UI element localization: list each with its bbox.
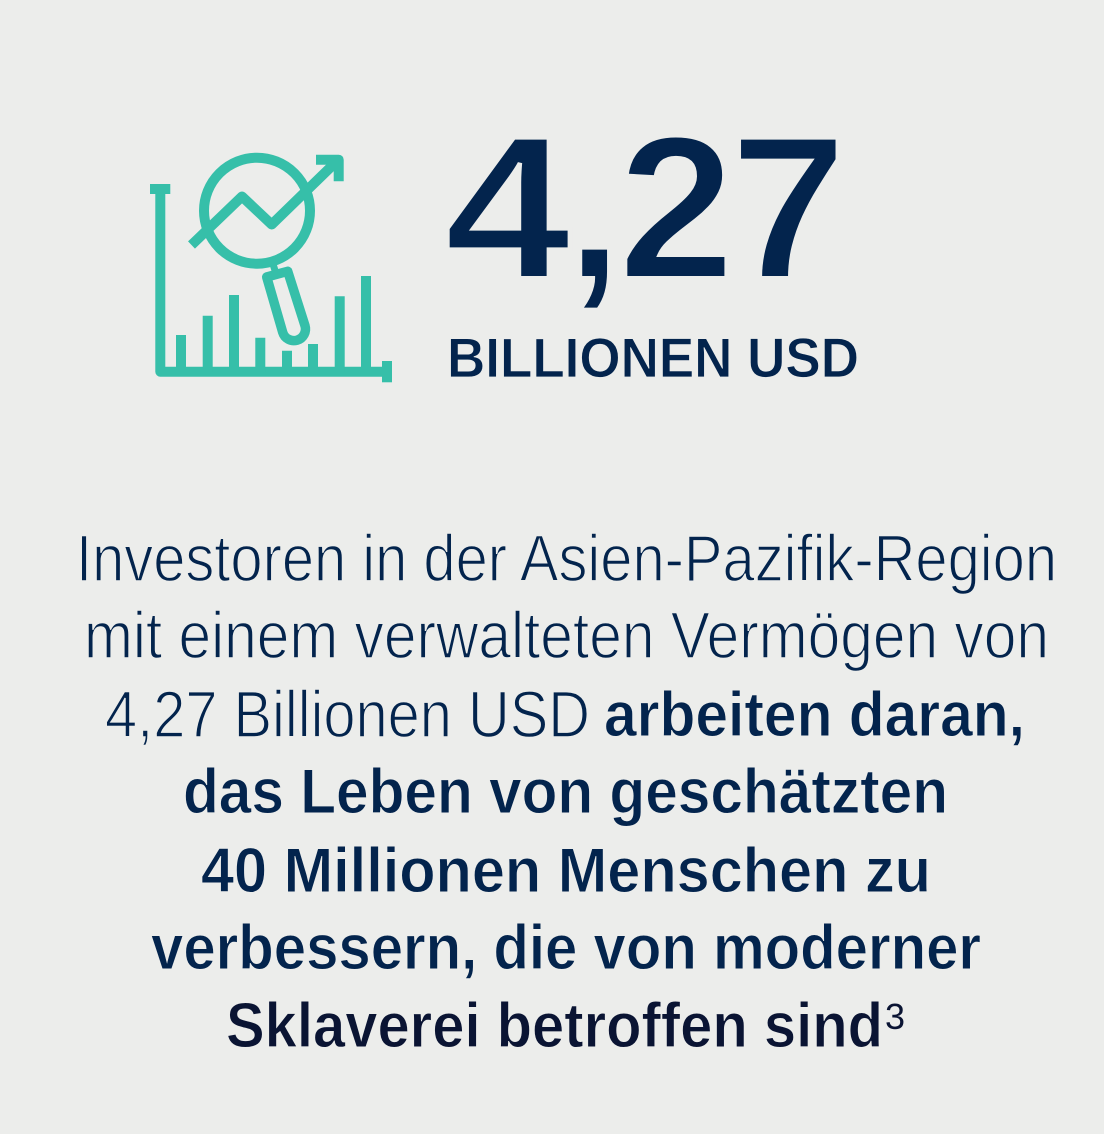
body text: arbeiten daran, xyxy=(604,680,1025,750)
big number: 4 xyxy=(444,93,571,321)
icon: chart with magnifying glass xyxy=(150,158,387,382)
body text: Sklaverei betroffen sind xyxy=(226,991,883,1061)
chart axes xyxy=(150,188,387,382)
unit label: BILLIONEN USD xyxy=(447,326,859,389)
big number: 27 xyxy=(618,94,847,321)
big number: , xyxy=(566,94,623,322)
body text: 3 xyxy=(885,996,905,1037)
trend arrow xyxy=(192,160,339,245)
big number xyxy=(444,93,847,322)
chart bars xyxy=(181,276,366,372)
body text: das Leben von geschätzten xyxy=(183,757,948,827)
body text xyxy=(76,521,1057,1061)
body text: 4,27 Billionen USD xyxy=(105,677,590,751)
body text: verbessern, die von moderner xyxy=(151,913,981,983)
body text: 40 Millionen Menschen zu xyxy=(201,836,931,906)
magnifying glass xyxy=(204,158,310,341)
